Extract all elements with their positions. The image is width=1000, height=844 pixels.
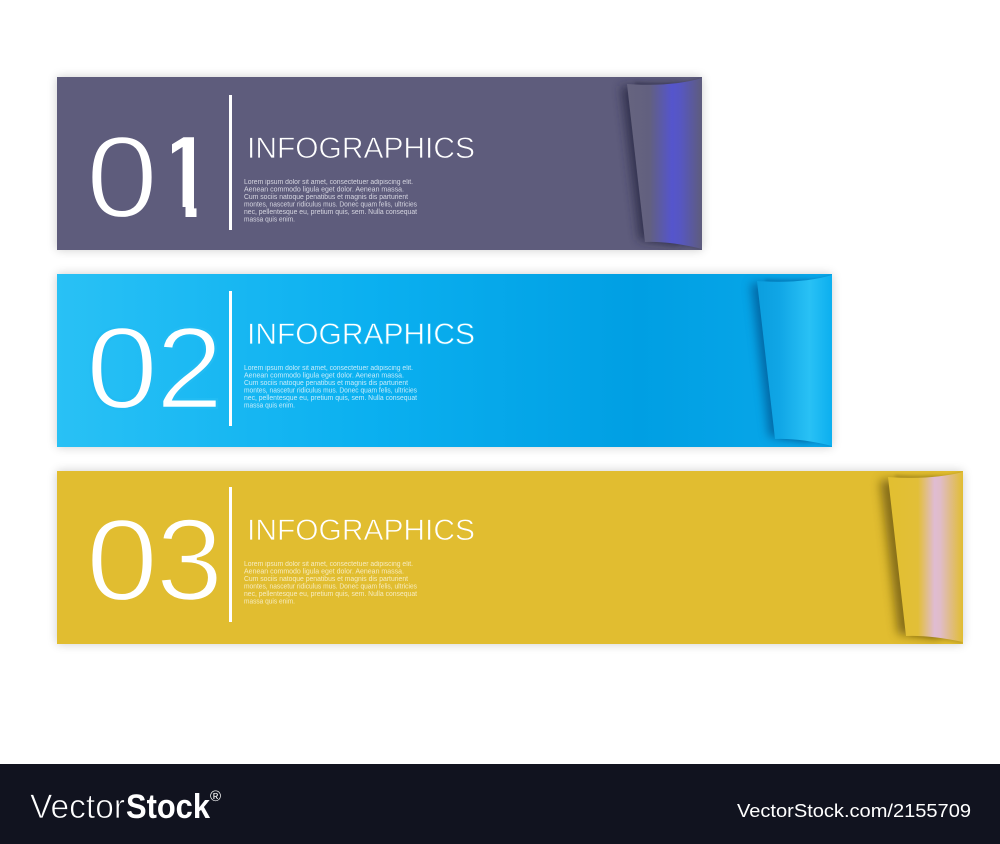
registered mark: ®: [210, 788, 221, 805]
body text: Cum sociis natoque penatibus et magnis dis parturient: [244, 194, 408, 201]
divider line: [229, 291, 232, 426]
footer band: [0, 764, 1000, 844]
divider line: [229, 487, 232, 622]
body text: montes, nascetur ridiculus mus. Donec quam felis, ultricies: [244, 584, 417, 590]
body text: Lorem ipsum dolor sit amet, consectetuer adipiscing elit.: [244, 365, 413, 372]
number 01: [86, 112, 222, 242]
logo: VectorStock: Stock: [126, 788, 210, 826]
body text: massa quis enim.: [244, 598, 295, 606]
divider line: [229, 95, 232, 230]
body text: nec, pellentesque eu, pretium quis, sem. Nulla consequat: [244, 395, 417, 402]
number 03: 3: [156, 495, 223, 625]
heading: INFOGRAPHICS: [247, 318, 475, 351]
number 02: 2: [156, 303, 223, 433]
logo: VectorStock: Vector: [30, 788, 125, 826]
body text: nec, pellentesque eu, pretium quis, sem. Nulla consequat: [244, 209, 417, 216]
heading: INFOGRAPHICS: [247, 132, 475, 165]
body text: massa quis enim.: [244, 216, 295, 224]
heading: INFOGRAPHICS: [247, 514, 475, 547]
number 01: 0: [86, 112, 158, 242]
body text: Cum sociis natoque penatibus et magnis dis parturient: [244, 576, 408, 583]
body text: montes, nascetur ridiculus mus. Donec quam felis, ultricies: [244, 202, 417, 208]
page curl: [621, 78, 702, 250]
number 03: 0: [86, 495, 158, 625]
body text: [244, 561, 417, 606]
panel: 01 purple banner: [57, 77, 702, 250]
body text: nec, pellentesque eu, pretium quis, sem. Nulla consequat: [244, 591, 417, 598]
panel: 02 blue banner: [57, 274, 832, 447]
number 02: [86, 303, 223, 433]
body text: Aenean commodo ligula eget dolor. Aenean massa.: [244, 568, 404, 576]
url and id: VectorStock.com/2155709: [737, 801, 971, 821]
body text: [244, 365, 417, 410]
number 01: 1: [150, 112, 222, 242]
body text: Aenean commodo ligula eget dolor. Aenean massa.: [244, 372, 404, 380]
body text: Lorem ipsum dolor sit amet, consectetuer adipiscing elit.: [244, 561, 413, 568]
body text: Aenean commodo ligula eget dolor. Aenean massa.: [244, 186, 404, 194]
number 03: [86, 495, 223, 625]
number 02: 0: [86, 303, 158, 433]
body text: [244, 179, 417, 224]
page curl: [880, 472, 963, 644]
body text: massa quis enim.: [244, 402, 295, 410]
logo: VectorStock: [30, 788, 210, 826]
body text: Lorem ipsum dolor sit amet, consectetuer adipiscing elit.: [244, 179, 413, 186]
body text: Cum sociis natoque penatibus et magnis dis parturient: [244, 380, 408, 387]
panel: 03 yellow banner: [57, 471, 963, 644]
page curl: [751, 275, 832, 447]
body text: montes, nascetur ridiculus mus. Donec quam felis, ultricies: [244, 388, 417, 394]
